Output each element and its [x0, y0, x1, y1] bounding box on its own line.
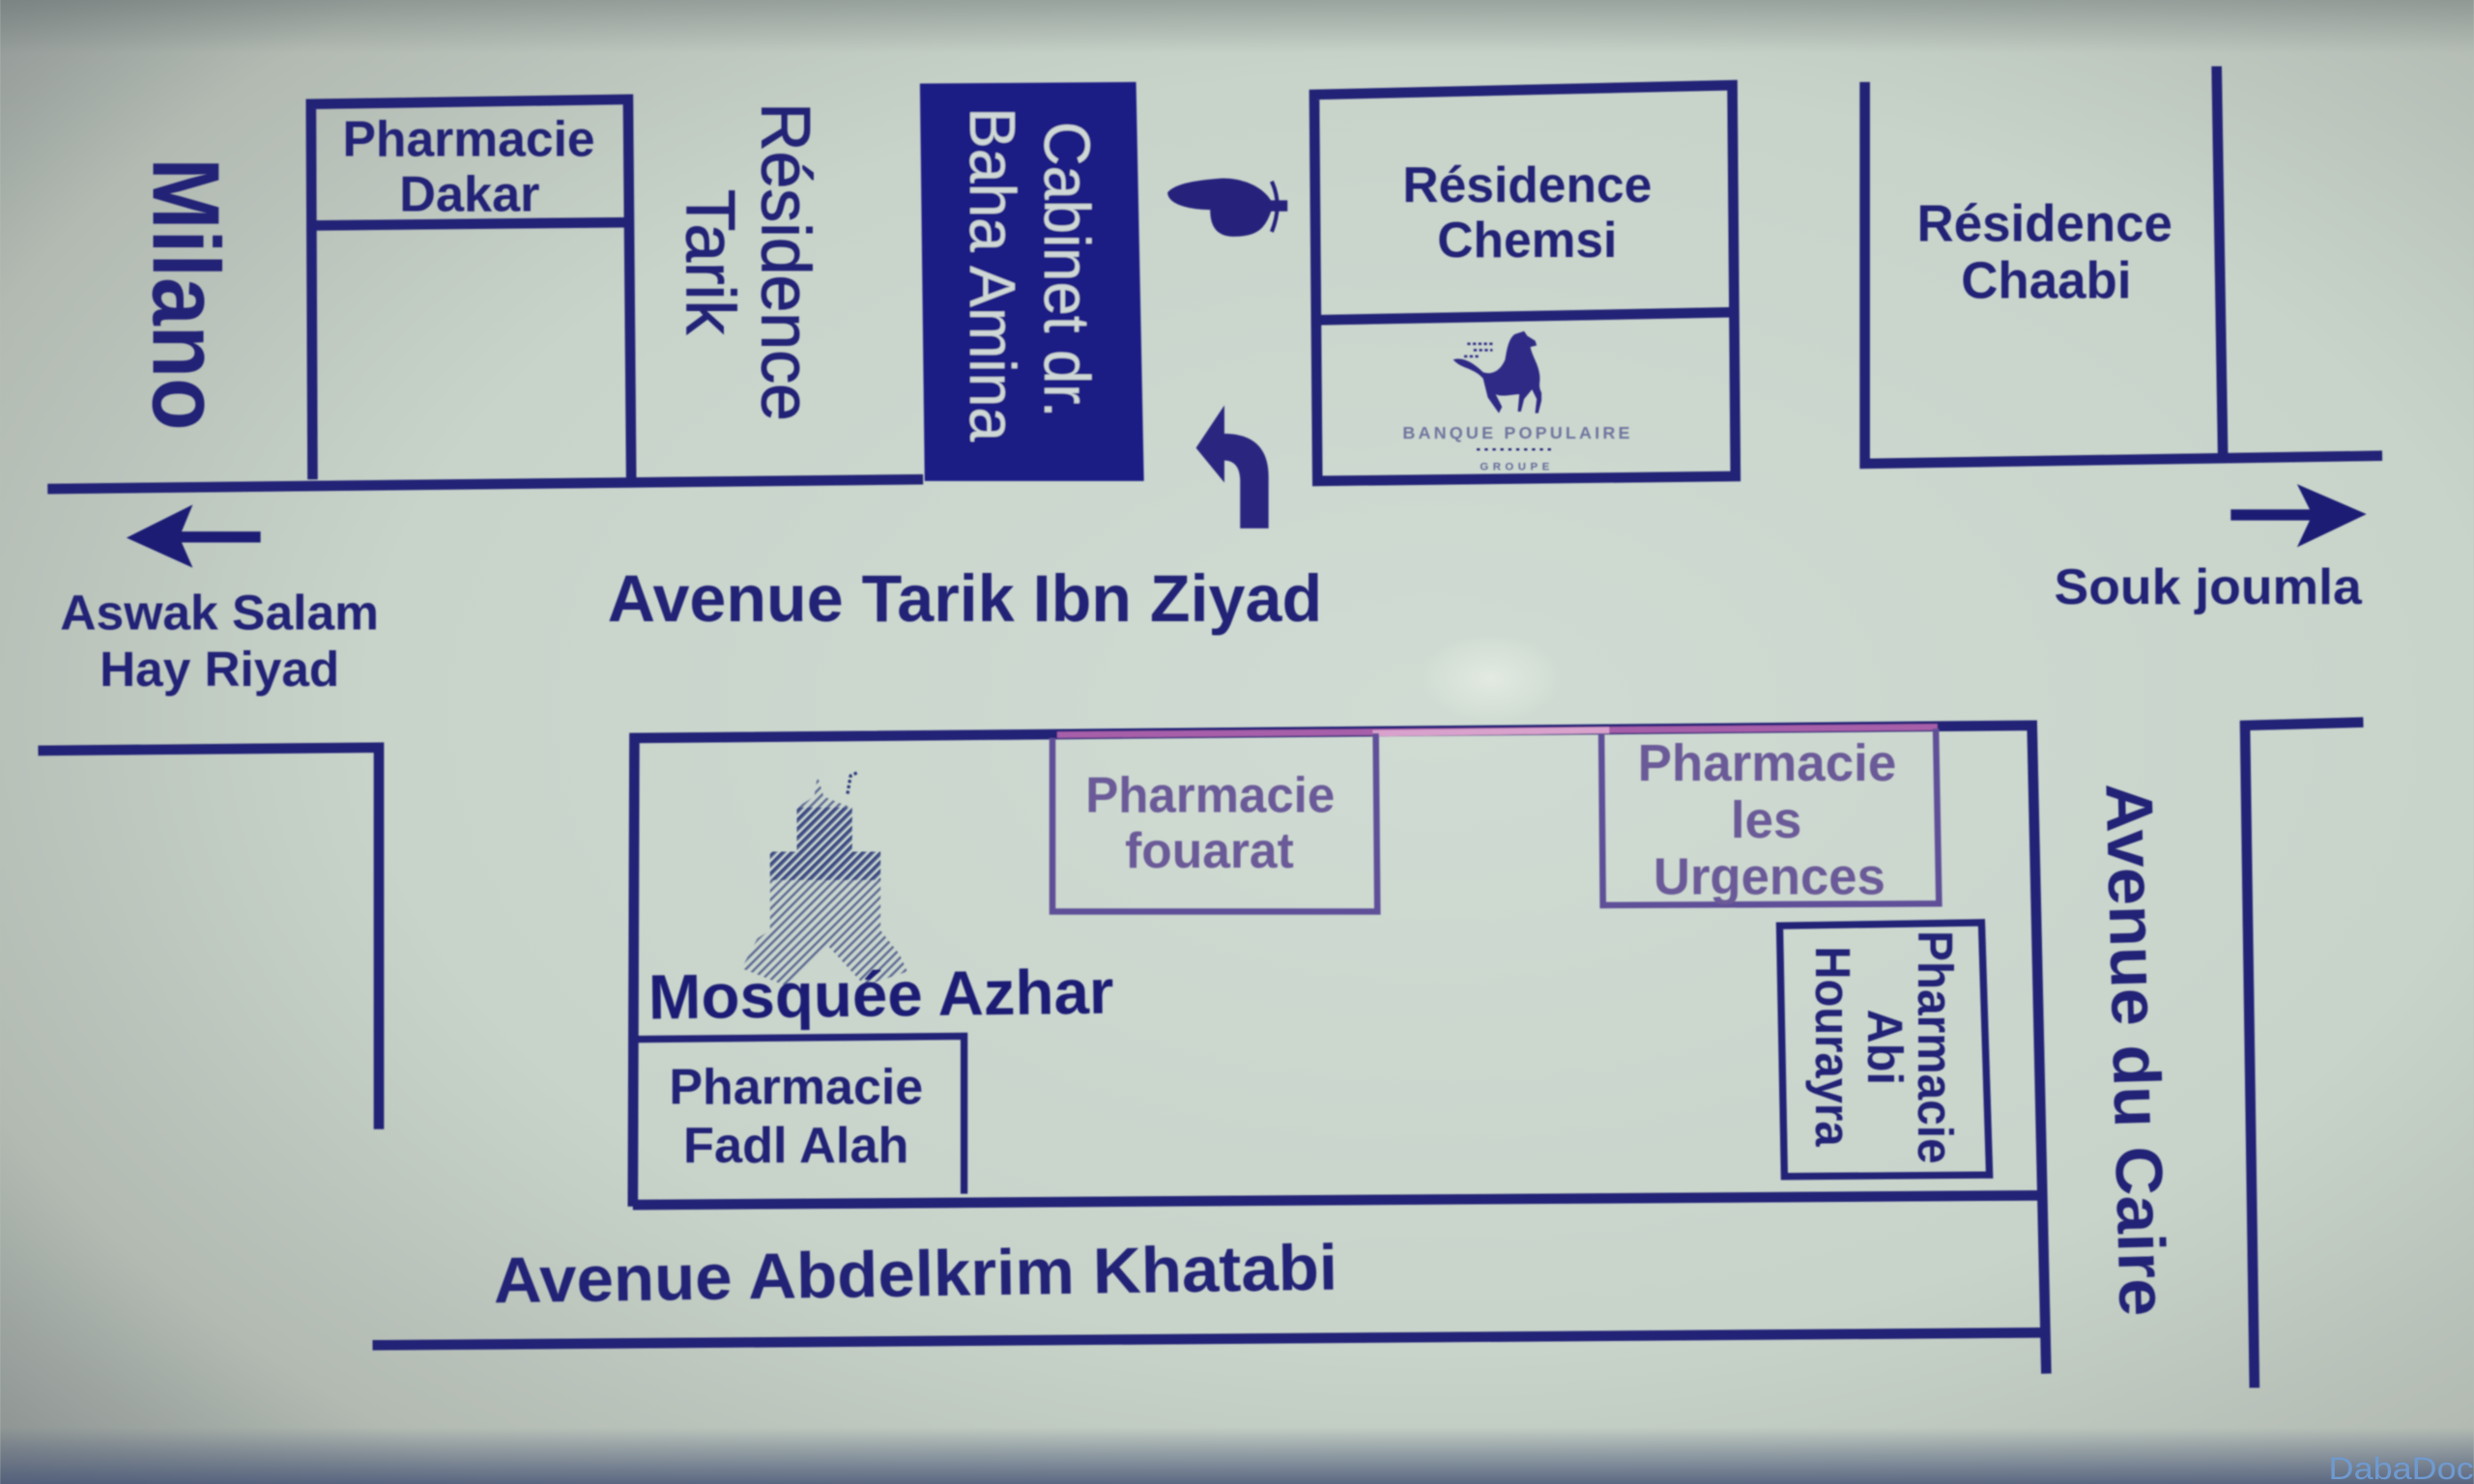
panel: Résidence Chaabi — [1865, 67, 2382, 464]
road label: Avenue Abdelkrim Khatabi: Avenue Abdelkrim Khatabi — [493, 1232, 1338, 1317]
road label: Avenue du Caire: Avenue du Caire — [2091, 783, 2180, 1317]
label: Aswak Salam Hay Riyad: Hay Riyad — [100, 642, 339, 697]
label: Résidence Tarik: Résidence — [747, 102, 824, 421]
panel: Résidence Chaabi: Chaabi — [1961, 252, 2132, 310]
panel: Résidence Chemsi and Banque Populaire: Résidence — [1402, 157, 1652, 214]
panel: Résidence Chemsi and Banque Populaire — [1314, 85, 1736, 481]
panel: Résidence Chaabi: Résidence — [1917, 195, 2172, 253]
block: south-west corner — [38, 748, 379, 1129]
panel: Pharmacie les Urgences: Pharmacie — [1638, 734, 1896, 792]
icon: Banque Populaire horse — [1453, 331, 1541, 414]
icon: turn-left arrow — [1196, 406, 1269, 528]
panel: Pharmacie Abi Hourayra: Hourayra — [1805, 946, 1860, 1147]
panel: Pharmacie Dakar block: Dakar — [399, 167, 540, 223]
block: Mosquée Azhar city block — [633, 726, 2046, 1374]
label: Résidence Tarik — [671, 102, 824, 421]
icon: pointing hand — [1167, 178, 1287, 237]
panel: Cabinet dr. Baha Amina: Cabinet dr. — [1030, 122, 1103, 418]
road edge: Avenue Tarik Ibn Ziyad north side — [47, 479, 923, 489]
arrow: east — [2230, 484, 2367, 547]
arrow: west — [127, 504, 261, 568]
panel: Pharmacie Dakar block: Pharmacie — [342, 112, 595, 168]
panel: Pharmacie Fadl Alah: Pharmacie — [669, 1060, 923, 1116]
panel: Pharmacie fouarat — [1052, 733, 1377, 911]
road label: Milano: Milano — [133, 157, 240, 431]
bank name: BANQUE POPULAIRE — [1402, 423, 1629, 442]
label: Aswak Salam Hay Riyad: Aswak Salam — [60, 585, 379, 640]
panel: Cabinet dr. Baha Amina — [920, 82, 1144, 481]
panel: Cabinet dr. Baha Amina: Baha Amina — [956, 107, 1028, 442]
label: Mosquée Azhar: Mosquée Azhar — [647, 956, 1114, 1032]
panel: Pharmacie Fadl Alah: Fadl Alah — [683, 1118, 908, 1174]
panel: Pharmacie Abi Hourayra: Abi — [1857, 1010, 1913, 1085]
panel: Pharmacie fouarat: Pharmacie — [1085, 768, 1335, 824]
panel: Pharmacie les Urgences: Urgences — [1654, 848, 1885, 906]
panel: Pharmacie fouarat: fouarat — [1125, 823, 1294, 879]
icon: mosque minaret — [741, 773, 907, 985]
panel: Résidence Chemsi and Banque Populaire: GROUPE — [1480, 461, 1550, 472]
road edge: Avenue Abdelkrim Khatabi south side — [372, 1332, 2046, 1345]
panel: Résidence Chemsi and Banque Populaire: Chemsi — [1437, 213, 1617, 269]
block: south-east corner — [2245, 723, 2363, 1387]
panel: Pharmacie Dakar block — [311, 100, 631, 479]
panel: Pharmacie Fadl Alah — [633, 1036, 964, 1194]
label: Aswak Salam Hay Riyad — [60, 585, 379, 697]
label: Résidence Tarik: Tarik — [671, 189, 748, 335]
panel: Pharmacie Abi Hourayra — [1780, 923, 1990, 1177]
panel: Pharmacie les Urgences: les — [1731, 791, 1801, 849]
label: Souk joumla: Souk joumla — [2055, 559, 2363, 615]
panel: Pharmacie les Urgences — [1601, 728, 1939, 906]
road label: Avenue Tarik Ibn Ziyad: Avenue Tarik Ibn Ziyad — [608, 561, 1322, 636]
panel: Pharmacie Abi Hourayra: Pharmacie — [1908, 930, 1963, 1164]
